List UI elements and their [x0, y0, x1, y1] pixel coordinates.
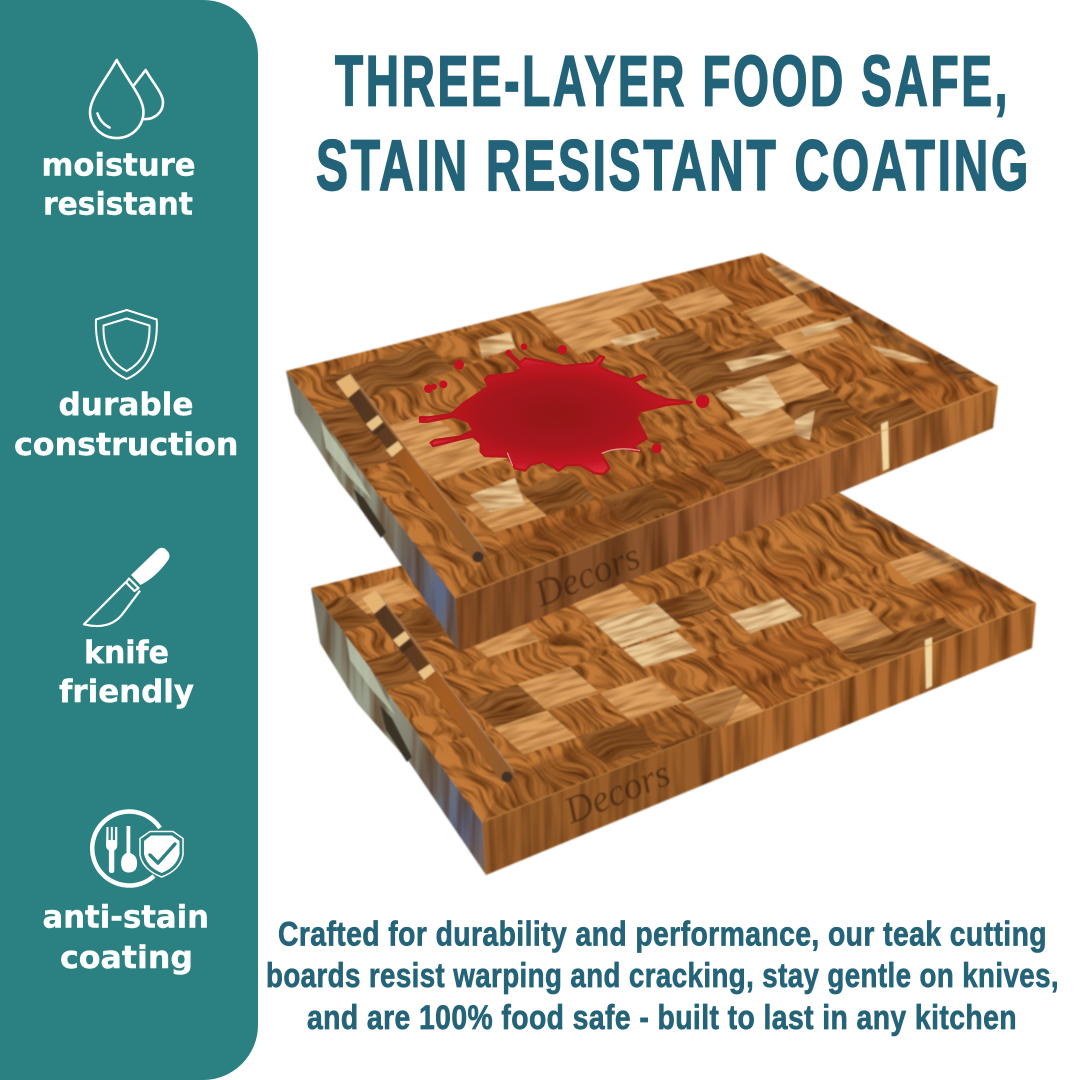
- board front face: [482, 603, 1036, 875]
- board front lip shading: [455, 468, 722, 598]
- label: knife friendly: knife: [84, 635, 169, 671]
- feature: moisture resistant: [42, 60, 196, 222]
- pale end-grain accents: [470, 317, 930, 512]
- label: moisture resistant: moisture: [42, 148, 196, 184]
- board left side face: [311, 588, 486, 875]
- icon: water drops: [90, 60, 163, 138]
- label: anti-stain coating: anti-stain: [42, 900, 209, 936]
- handle groove: [362, 590, 514, 782]
- icon: knife: [84, 548, 170, 626]
- bottom cutting board: [310, 492, 1038, 876]
- top cutting board with red stain: [285, 252, 1000, 652]
- juice groove: [510, 505, 1000, 778]
- red stain: [420, 343, 709, 474]
- board left side face: [286, 371, 459, 652]
- icon: shield: [96, 310, 157, 379]
- label: durable construction: durable: [58, 387, 194, 423]
- label: knife friendly: friendly: [59, 674, 194, 710]
- label: moisture resistant: resistant: [43, 186, 193, 222]
- label: anti-stain coating: coating: [60, 940, 193, 976]
- board front lip shading: [482, 692, 745, 822]
- board front face: [455, 386, 998, 652]
- label: durable construction: construction: [14, 427, 238, 463]
- juice groove: [485, 268, 965, 556]
- board top face: [286, 252, 998, 598]
- feature: durable construction: [14, 310, 238, 463]
- engraved logo: Decors: [528, 535, 646, 616]
- feature: knife friendly: [59, 548, 194, 710]
- handle groove: [336, 374, 486, 562]
- feature: anti-stain coating: [42, 812, 209, 976]
- engraved logo: Decors: [558, 752, 676, 833]
- sidebar panel: [0, 0, 258, 1080]
- board top face: [310, 492, 1036, 822]
- icon: cutlery plate and shield: [92, 812, 183, 886]
